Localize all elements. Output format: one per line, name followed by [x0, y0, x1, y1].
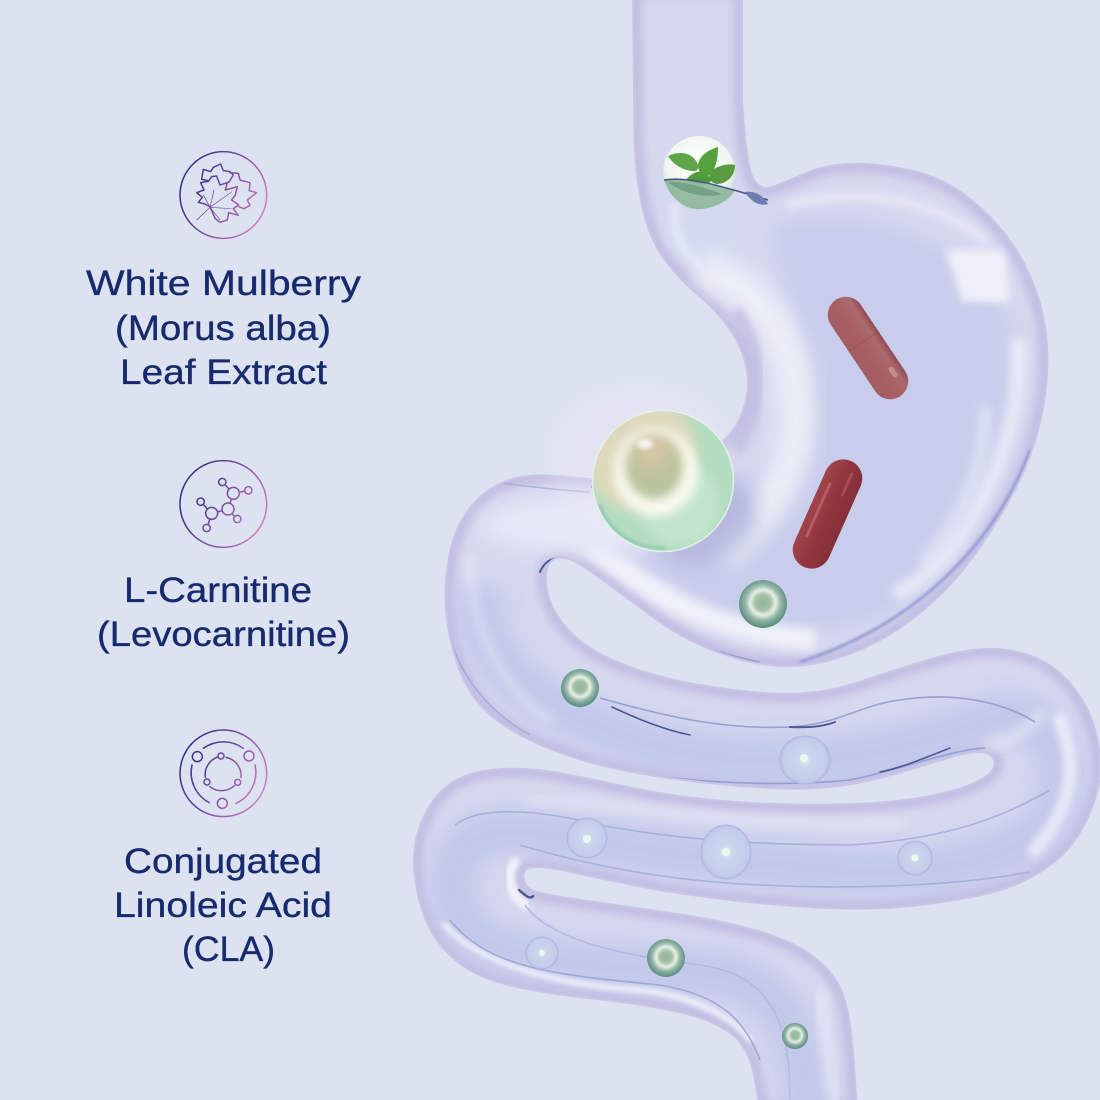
- lesser curve band: [735, 310, 756, 452]
- ball shadow: [633, 467, 757, 563]
- small green sphere upper intestine: [561, 669, 599, 707]
- icon: maple leaves: [180, 152, 267, 238]
- lens droplet: [664, 180, 735, 209]
- heading: Conjugated Linoleic Acid: Conjugated: [124, 842, 322, 881]
- heading: White Mulberry: White Mulberry: [86, 264, 362, 303]
- capsule: upper red softgel: [821, 290, 915, 406]
- stomach lower white strip: [590, 545, 815, 640]
- small green sphere at exit: [782, 1023, 808, 1049]
- esophagus core: [657, 0, 723, 130]
- heading: Conjugated Linoleic Acid: (CLA): [182, 930, 275, 969]
- large pearl sphere: [552, 410, 734, 552]
- heading: White Mulberry: [86, 264, 362, 392]
- tract outer edge: [414, 0, 1100, 1100]
- icon: orbital rings: [180, 730, 267, 817]
- mint leaves: [668, 147, 735, 184]
- digestive tract illustration: [414, 0, 1100, 1100]
- transparent bubbles: [526, 736, 932, 969]
- heading: Conjugated Linoleic Acid: [114, 842, 332, 969]
- heading: White Mulberry: Leaf Extract: [120, 353, 327, 392]
- glass highlights: [445, 197, 1070, 1100]
- stomach white crescent: [700, 268, 797, 555]
- soft rim: [414, 0, 1100, 1100]
- inner contour lines: [445, 450, 1050, 1100]
- esophagus chamber: [663, 192, 747, 264]
- heading: L-Carnitine: [97, 571, 350, 654]
- dark creases: [519, 480, 950, 897]
- icon: molecule: [180, 461, 267, 547]
- stomach lumen: [643, 220, 1012, 629]
- mint leaf bubble: [663, 136, 768, 209]
- heading: Conjugated Linoleic Acid: Linoleic Acid: [114, 886, 332, 925]
- small green sphere lower intestine: [647, 939, 685, 977]
- small green sphere in stomach: [739, 580, 787, 628]
- heading: White Mulberry: (Morus alba): [115, 309, 331, 348]
- capsule: lower red softgel: [787, 453, 868, 575]
- intestine core shading: [453, 585, 1062, 1100]
- glass tract body: [414, 0, 1100, 1100]
- heading: L-Carnitine: (Levocarnitine): [97, 615, 350, 654]
- heading: L-Carnitine: L-Carnitine: [124, 571, 312, 610]
- upper-left stomach wash: [486, 498, 658, 562]
